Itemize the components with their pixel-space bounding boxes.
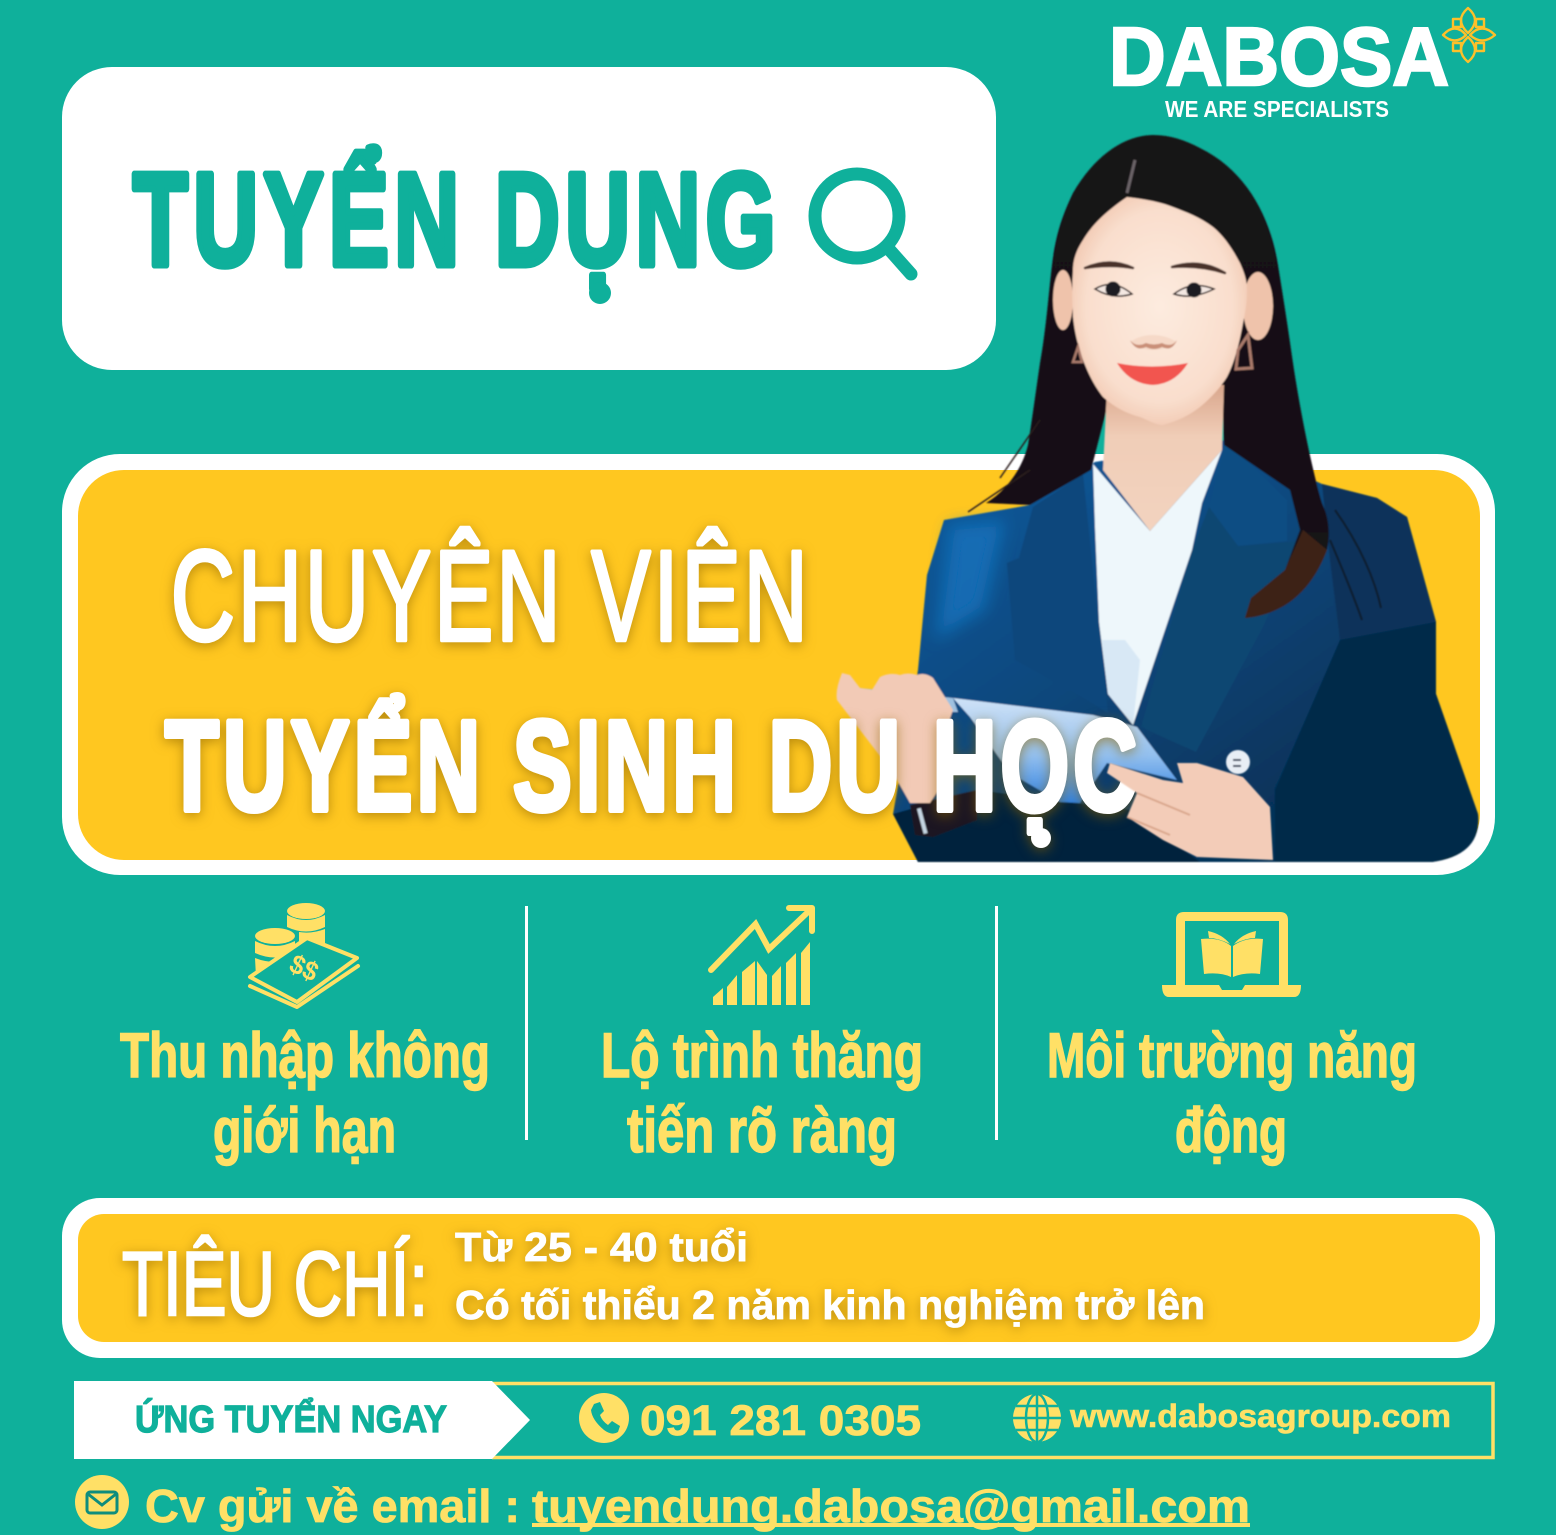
logo: Dabosa: DABOSA [1109, 10, 1449, 103]
heading: criteria: TIÊU CHÍ: [122, 1234, 428, 1335]
blazer dark arm [1275, 622, 1478, 862]
label: income [120, 1021, 490, 1166]
text: criteria list: Từ 25 - 40 tuổi [455, 1224, 748, 1270]
panel: job banner [62, 454, 1495, 875]
icon: envelope [75, 1475, 129, 1529]
mouth [1117, 363, 1188, 385]
tablet [953, 698, 1177, 803]
ears [1053, 270, 1073, 330]
apply now arrow: ỨNG TUYỂN NGAY [135, 1396, 447, 1441]
earrings [1236, 335, 1252, 369]
label: career path [601, 1021, 923, 1166]
hair parting [1127, 160, 1135, 193]
label: career path: tiến rõ ràng [627, 1096, 897, 1166]
apply now arrow [74, 1381, 530, 1459]
hair [986, 135, 1329, 618]
right shoulder dark [1322, 484, 1436, 640]
label: environment: Môi trường năng [1047, 1021, 1417, 1091]
heading: job title [165, 525, 1141, 848]
heading: job title: CHUYÊN VIÊN [171, 525, 811, 668]
icon: coins and money [250, 903, 358, 1007]
left hand [837, 673, 953, 803]
shirt [1093, 450, 1222, 725]
right lapel [1225, 446, 1286, 541]
logo: Dabosa: WE ARE SPECIALISTS [1165, 96, 1389, 122]
photo: woman in navy blazer [837, 135, 1478, 862]
email line: tuyendung.dabosa@gmail.com [532, 1480, 1250, 1532]
blazer lower shadow [893, 790, 1200, 862]
sleeve cuff [910, 790, 977, 837]
benefit: income [120, 903, 490, 1166]
heading: job title: TUYỂN SINH DU HỌC [165, 695, 1141, 838]
benefit: career path [601, 908, 923, 1166]
website: www.dabosagroup.com [1069, 1398, 1451, 1434]
icon: laptop with book [1162, 912, 1301, 997]
benefit: environment [1047, 912, 1417, 1166]
email line [75, 1475, 1250, 1532]
eyes [1095, 285, 1132, 296]
text: criteria list: Có tối thiểu 2 năm kinh nghiệm trở lên [455, 1282, 1205, 1328]
icon: phone [579, 1393, 629, 1443]
face [1072, 197, 1247, 425]
blazer [893, 440, 1478, 862]
icon: logo flower [1443, 8, 1495, 62]
text: criteria list [455, 1224, 1205, 1328]
label: income: Thu nhập không [120, 1021, 490, 1091]
email text: Cv gửi về email : [145, 1480, 520, 1532]
nose [1130, 340, 1177, 349]
phone number: 091 281 0305 [640, 1397, 921, 1445]
shoulder highlight [935, 520, 1005, 640]
left lapel [1007, 474, 1092, 637]
label: income: giới hạn [213, 1096, 396, 1166]
right hand on tablet [1107, 750, 1273, 860]
panel: criteria [62, 1198, 1495, 1358]
blazer button [1226, 750, 1250, 774]
icon: globe [1013, 1394, 1061, 1442]
label: environment: động [1175, 1096, 1287, 1166]
contact bar [74, 1381, 1493, 1459]
eyebrows [1085, 262, 1225, 273]
icon: search [815, 174, 911, 274]
divider [525, 906, 528, 1140]
icon: coins and money: $$ [285, 948, 323, 988]
frame [492, 1384, 1493, 1458]
hair strand end [1245, 530, 1327, 618]
divider [995, 906, 998, 1140]
nose shading [1132, 335, 1176, 350]
icon: growth chart [711, 908, 812, 1005]
neck [1103, 385, 1224, 531]
label: environment [1047, 1021, 1417, 1166]
panel: title box [62, 67, 996, 370]
title: tuyển dụng [133, 146, 781, 304]
title: tuyển dụng: TUYỂN DỤNG [133, 146, 781, 293]
label: career path: Lộ trình thăng [601, 1021, 923, 1091]
